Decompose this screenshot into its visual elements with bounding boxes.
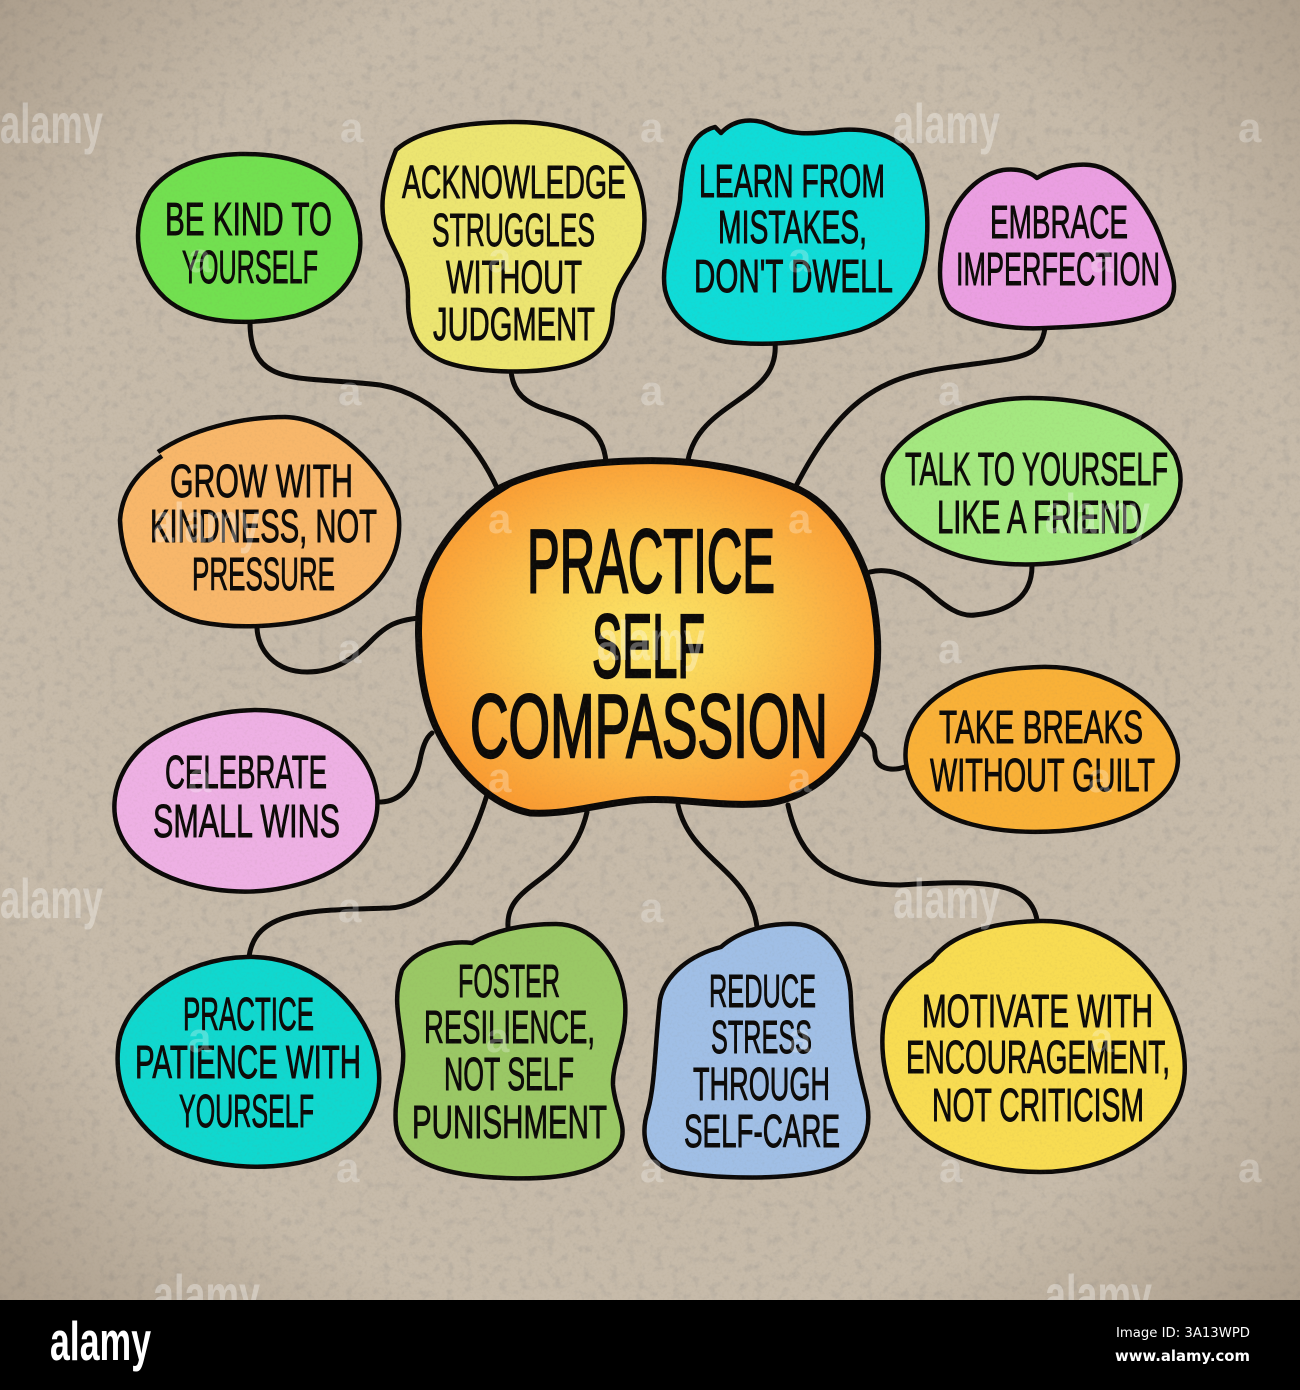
bottom credit bar [0, 1300, 1300, 1390]
label: BE KIND TO [165, 193, 332, 245]
central title: SELF [592, 597, 705, 697]
connectors [249, 322, 1045, 957]
image watermarks: alamy [893, 867, 1000, 930]
node: grow with kindness [120, 417, 399, 626]
label: THROUGH [693, 1058, 830, 1110]
label: PRACTICE [183, 988, 314, 1040]
label [150, 455, 377, 600]
label: PATIENCE WITH [135, 1036, 361, 1088]
image id: Image ID: 3A13WPD [1116, 1325, 1250, 1341]
image watermarks: a [788, 495, 812, 542]
image watermarks: a [938, 625, 962, 672]
label [694, 155, 893, 302]
label [905, 443, 1168, 543]
blob [382, 122, 644, 372]
label [412, 955, 607, 1148]
image watermarks: a [788, 234, 812, 281]
label: LEARN FROM [699, 155, 885, 207]
node: foster resilience [396, 924, 625, 1178]
node: acknowledge struggles [382, 122, 644, 372]
blob [118, 957, 379, 1167]
label: KINDNESS, NOT [150, 500, 377, 552]
image watermarks: a [338, 367, 362, 414]
image watermarks: a [938, 367, 962, 414]
label [930, 701, 1155, 801]
label: SMALL WINS [153, 795, 340, 847]
image watermarks: alamy [0, 92, 103, 155]
label: PUNISHMENT [412, 1096, 607, 1148]
image watermarks: alamy [1045, 1263, 1152, 1326]
image watermarks: a [1088, 754, 1112, 801]
label [956, 196, 1160, 295]
central title: PRACTICE [527, 512, 775, 612]
label: STRUGGLES [432, 204, 595, 256]
label: EMBRACE [990, 196, 1128, 248]
label: YOURSELF [182, 241, 318, 293]
alamy logo: alamy [50, 1310, 151, 1372]
node: learn from mistakes [664, 120, 927, 344]
blob [114, 710, 377, 892]
node: embrace imperfection [940, 165, 1174, 328]
label: FOSTER [458, 955, 560, 1007]
image watermarks: a [340, 104, 364, 151]
image watermarks: a [486, 1014, 510, 1061]
node: be kind to yourself [138, 154, 360, 322]
blob [882, 921, 1185, 1172]
image watermarks: a [488, 754, 512, 801]
image watermarks: a [1090, 234, 1114, 281]
node: take breaks [905, 667, 1178, 832]
node: talk to yourself [883, 398, 1180, 564]
image watermarks: a [788, 1014, 812, 1061]
label: TAKE BREAKS [939, 701, 1143, 753]
central blob [419, 461, 878, 813]
blob [664, 120, 927, 344]
label [684, 965, 840, 1157]
label: ACKNOWLEDGE [402, 156, 626, 208]
image watermarks: a [188, 754, 212, 801]
label [135, 988, 361, 1137]
label: MISTAKES, [718, 201, 867, 253]
node: reduce stress [644, 924, 868, 1178]
label: MOTIVATE WITH [922, 985, 1153, 1037]
image watermarks: a [188, 1014, 212, 1061]
label: GROW WITH [170, 455, 353, 507]
label [402, 156, 626, 350]
central title [470, 512, 828, 777]
blob [396, 924, 625, 1178]
label: STRESS [711, 1011, 812, 1063]
image watermarks: a [1238, 104, 1262, 151]
image watermarks: a [788, 754, 812, 801]
image watermarks: alamy [1045, 482, 1150, 545]
blob [644, 924, 868, 1178]
node: practice patience [118, 957, 379, 1167]
label: NOT SELF [444, 1048, 574, 1100]
label: JUDGMENT [433, 298, 595, 350]
label [906, 985, 1170, 1131]
label: PRESSURE [192, 548, 335, 600]
label: WITHOUT [446, 251, 582, 303]
label [165, 193, 332, 293]
image watermarks: alamy [153, 1263, 260, 1326]
label: IMPERFECTION [956, 243, 1160, 295]
image watermarks: a [338, 625, 362, 672]
label: SELF-CARE [684, 1105, 840, 1157]
image watermarks: alamy [893, 92, 1000, 155]
image watermarks: a [1238, 1144, 1262, 1191]
label: CELEBRATE [165, 746, 327, 798]
image watermarks: a [1090, 1014, 1114, 1061]
image watermarks: a [939, 1144, 963, 1191]
label: WITHOUT GUILT [930, 749, 1155, 801]
image watermarks: alamy [597, 609, 705, 672]
image watermarks: a [338, 884, 362, 931]
image watermarks: a [488, 234, 512, 281]
label [153, 746, 340, 847]
blob [138, 154, 360, 322]
blob stroke overshoot [468, 484, 510, 514]
image watermarks: a [640, 884, 664, 931]
label: NOT CRITICISM [932, 1079, 1144, 1131]
blob [883, 398, 1180, 564]
site url: www.alamy.com [1115, 1347, 1250, 1365]
blob [120, 417, 399, 626]
label: YOURSELF [179, 1085, 314, 1137]
central topic [419, 461, 878, 813]
node: celebrate small wins [114, 710, 377, 892]
image watermarks: a [640, 1144, 664, 1191]
image watermarks: a [336, 1144, 360, 1191]
label: DON'T DWELL [694, 250, 893, 302]
label: LIKE A FRIEND [937, 491, 1142, 543]
node: motivate with encouragement [882, 921, 1185, 1172]
image watermarks: a [640, 367, 664, 414]
central title: COMPASSION [470, 677, 828, 777]
image watermarks: a [188, 234, 212, 281]
image watermarks: alamy [153, 491, 260, 554]
blob [905, 667, 1178, 832]
image watermarks: alamy [0, 867, 103, 930]
label: RESILIENCE, [424, 1001, 595, 1053]
image watermarks: a [640, 104, 664, 151]
label: REDUCE [709, 965, 816, 1017]
image watermarks: a [488, 495, 512, 542]
blob [940, 165, 1174, 328]
